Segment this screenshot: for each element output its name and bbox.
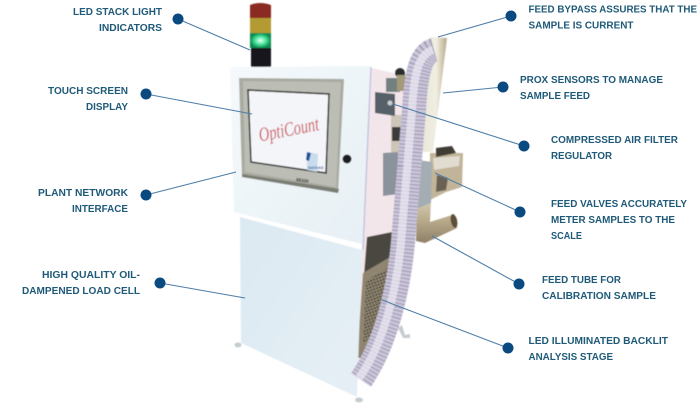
screen [248,90,329,173]
feed tube [416,200,459,243]
machine photo illustration [230,3,463,402]
brand mark: SATAKE [308,165,324,170]
label: REGULATOR [551,150,612,162]
callout: backlit analysis stage [382,300,669,363]
dot [514,278,524,290]
feed valves [430,146,463,200]
dot [506,10,516,22]
dot [502,342,514,354]
dot [172,14,184,24]
air regulator [375,68,411,155]
dot [154,278,166,288]
cabinet edge accent [363,67,371,250]
label: LED STACK LIGHT [73,6,163,18]
leader line [438,16,511,37]
dot [514,206,526,218]
dot [518,140,530,152]
clear spiral hose [359,50,434,380]
label: SCALE [551,230,582,242]
label: INTERFACE [72,203,128,215]
leader line [432,236,519,284]
label: SAMPLE FEED [520,90,590,102]
label: DAMPENED LOAD CELL [22,285,141,297]
callout: touch screen display [48,85,252,114]
lower cabinet panel [240,217,362,397]
label: FEED VALVES ACCURATELY [551,198,687,210]
touch screen bezel [239,78,344,193]
label: HIGH QUALITY OIL- [42,269,140,281]
leader line [146,94,252,114]
label: DISPLAY [86,101,128,113]
cabinet side panel [357,67,410,390]
leader line [382,300,508,348]
label: METER SAMPLES TO THE [551,214,675,226]
upper cabinet panel [230,66,370,244]
label: ANALYSIS STAGE [528,351,613,363]
callout: LED stack light indicators [73,6,250,50]
callout: prox sensors [443,74,663,102]
power button [342,154,352,164]
callout: feed valves [435,173,687,242]
callout: plant network interface [38,172,236,215]
grey mounting plates [383,152,398,196]
label: PLANT NETWORK [38,187,128,199]
dot [140,88,152,100]
leader line [435,173,520,212]
label: INDICATORS [99,22,162,34]
leader line [146,172,236,195]
label: LED ILLUMINATED BACKLIT [528,335,669,347]
label: TOUCH SCREEN [48,85,128,97]
label: PROX SENSORS TO MANAGE [520,74,663,86]
leader line [160,283,245,298]
label: FEED TUBE FOR [542,274,621,286]
callout: compressed air filter regulator [393,104,678,162]
stack light [250,3,271,67]
leader line [393,104,524,146]
callout: feed tube [432,236,656,302]
label: COMPRESSED AIR FILTER [551,134,678,146]
callout: feed bypass [438,4,697,37]
feet [234,325,410,402]
label: CALIBRATION SAMPLE [542,290,656,302]
callout: load cell [22,269,245,298]
dark cavity and backlit stage [357,232,392,358]
dot [140,190,152,200]
label: SAMPLE IS CURRENT [528,20,634,32]
leader line [443,87,503,93]
leader line [178,19,250,50]
screen logo: OptiCount [257,113,321,146]
dot [498,82,508,92]
bezel buttons: 88339 [296,177,309,184]
bypass pipe [420,37,447,152]
